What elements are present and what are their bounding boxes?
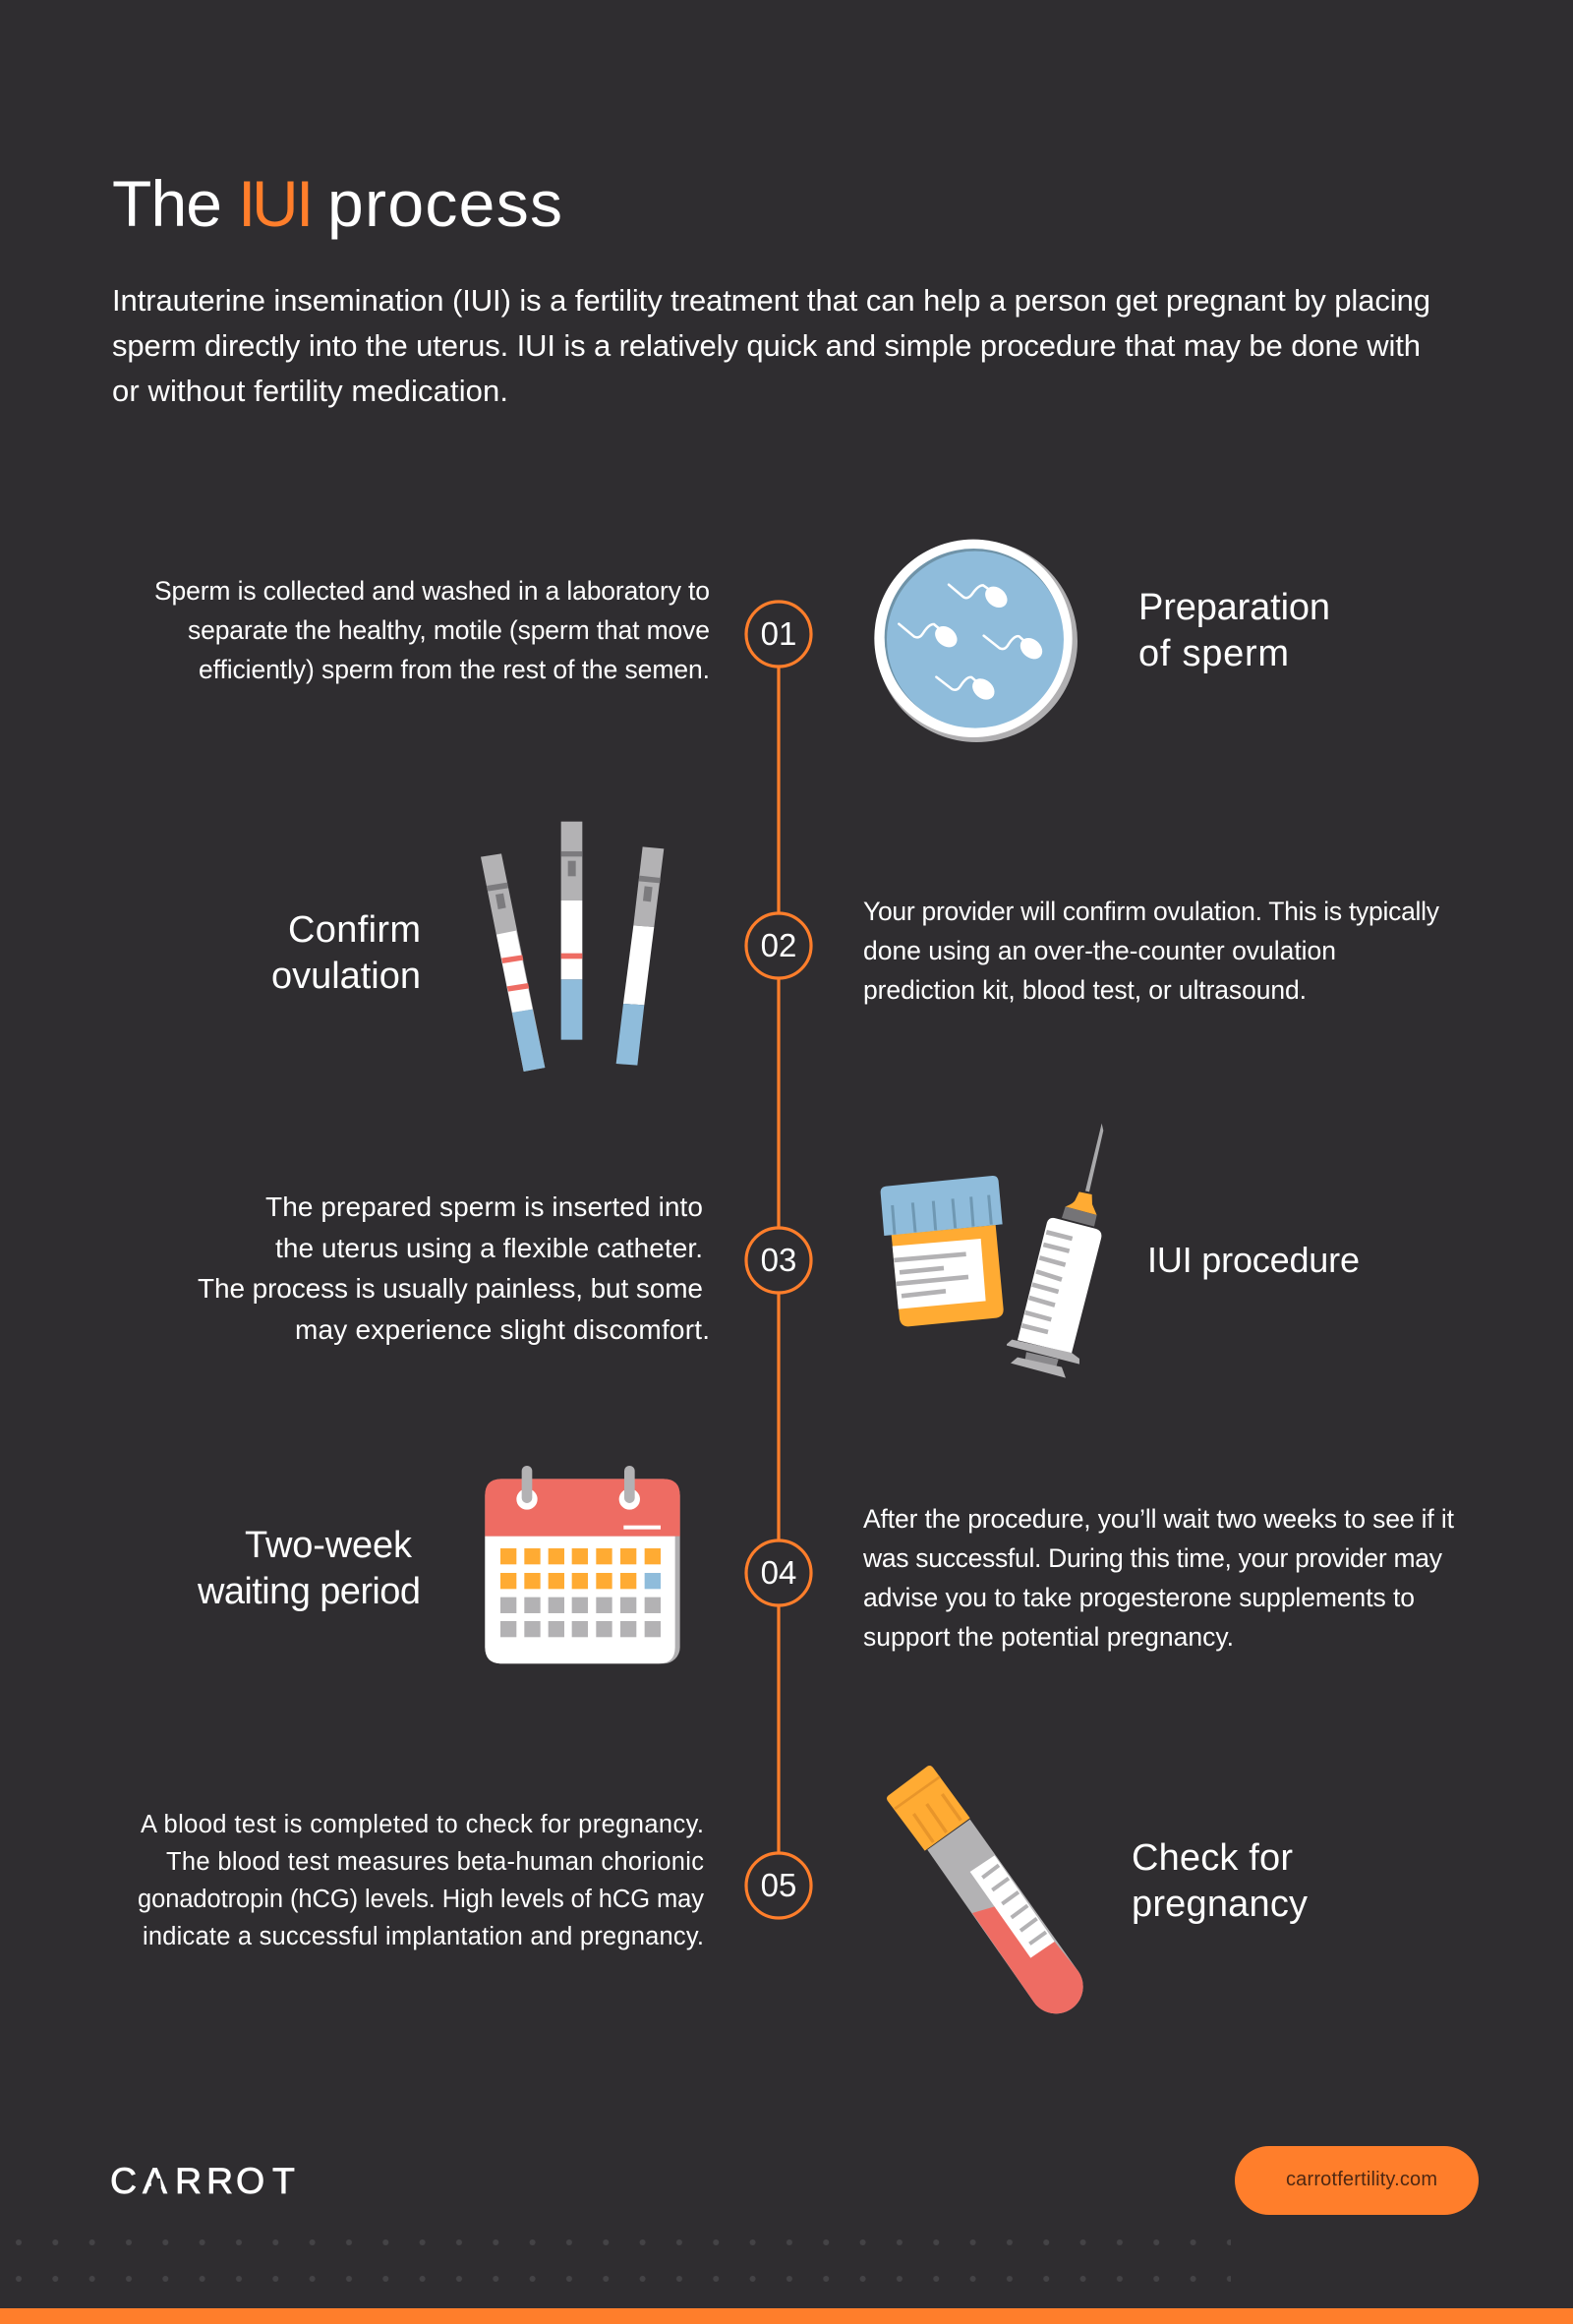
step 3 description: The prepared sperm is inserted into [265, 1191, 703, 1222]
step 5 description: The blood test measures beta-human chorionic [166, 1848, 704, 1876]
step 4 marker: 04 [761, 1554, 796, 1591]
step 1 heading [1138, 587, 1330, 674]
step 2 marker: 02 [761, 927, 796, 963]
website button: carrotfertility.com [1286, 2169, 1437, 2190]
step 3 description: The process is usually painless, but some [198, 1273, 703, 1304]
intro paragraph: or without fertility medication. [112, 374, 508, 408]
step 1 heading: Preparation [1138, 587, 1330, 628]
step 1 description: Sperm is collected and washed in a laboratory to [154, 576, 710, 606]
step 2 marker [746, 913, 811, 978]
step 1 heading: of sperm [1138, 633, 1289, 674]
step 2 heading: Confirm [288, 909, 421, 951]
step 3 heading: IUI procedure [1147, 1240, 1360, 1280]
step 2 description [863, 897, 1440, 1005]
step 4 heading: waiting period [197, 1571, 421, 1612]
step 5 heading: Check for [1132, 1837, 1293, 1879]
step 5 marker: 05 [761, 1867, 796, 1903]
title: The [112, 167, 222, 240]
intro paragraph: sperm directly into the uterus. IUI is a relatively quick and simple procedure that may be done with [112, 328, 1421, 363]
step 4 description: was successful. During this time, your provider may [862, 1543, 1443, 1573]
step 4 description: support the potential pregnancy. [863, 1622, 1234, 1652]
step 5 description: A blood test is completed to check for pregnancy. [141, 1811, 704, 1838]
step 4 description [862, 1504, 1455, 1652]
intro paragraph: Intrauterine insemination (IUI) is a fertility treatment that can help a person get pregnant by placing [112, 283, 1430, 318]
step 1 description [154, 576, 710, 684]
step 1 description: efficiently) sperm from the rest of the semen. [199, 655, 710, 684]
step 5 heading: pregnancy [1132, 1884, 1308, 1925]
bottom orange bar [0, 2308, 1573, 2324]
step 1 marker: 01 [761, 615, 796, 652]
step 4 marker [746, 1540, 811, 1605]
step 4 description: advise you to take progesterone supplements to [863, 1583, 1415, 1612]
icon: ovulation test strips [481, 822, 664, 1072]
step 2 description: done using an over-the-counter ovulation [863, 936, 1336, 965]
step 3 description: the uterus using a flexible catheter. [275, 1233, 703, 1263]
icon: calendar [485, 1466, 680, 1663]
step 5 description [138, 1811, 704, 1950]
step 5 heading [1132, 1837, 1308, 1925]
step 3 marker: 03 [761, 1242, 796, 1278]
icon: blood test tube [887, 1766, 1083, 2013]
step 2 description: Your provider will confirm ovulation. This is typically [863, 897, 1440, 926]
step 5 marker [746, 1853, 811, 1918]
timeline line [777, 634, 781, 1886]
icon: petri dish with sperm [874, 540, 1078, 742]
step 2 description: prediction kit, blood test, or ultrasound. [863, 975, 1307, 1005]
title [112, 167, 562, 240]
logo: Carrot: CARROT [110, 2160, 295, 2201]
step 4 heading: Two-week [245, 1525, 413, 1566]
step 2 heading [271, 909, 421, 997]
step 5 description: indicate a successful implantation and pregnancy. [143, 1923, 704, 1950]
step 3 description: may experience slight discomfort. [295, 1314, 710, 1345]
title: process [327, 167, 562, 240]
step 1 marker [746, 602, 811, 667]
icon: specimen jar and syringe [881, 1124, 1103, 1378]
website button [1235, 2146, 1479, 2215]
intro paragraph [112, 283, 1430, 408]
step 4 heading [197, 1525, 421, 1612]
step 1 description: separate the healthy, motile (sperm that move [188, 615, 710, 645]
step 2 heading: ovulation [271, 956, 421, 997]
dotted pattern [0, 2235, 1231, 2307]
step 4 description: After the procedure, you’ll wait two weeks to see if it [863, 1504, 1455, 1534]
title: IUI [238, 167, 314, 240]
step 5 description: gonadotropin (hCG) levels. High levels of hCG may [138, 1886, 704, 1913]
step 3 marker [746, 1228, 811, 1293]
step 3 description [198, 1191, 710, 1345]
